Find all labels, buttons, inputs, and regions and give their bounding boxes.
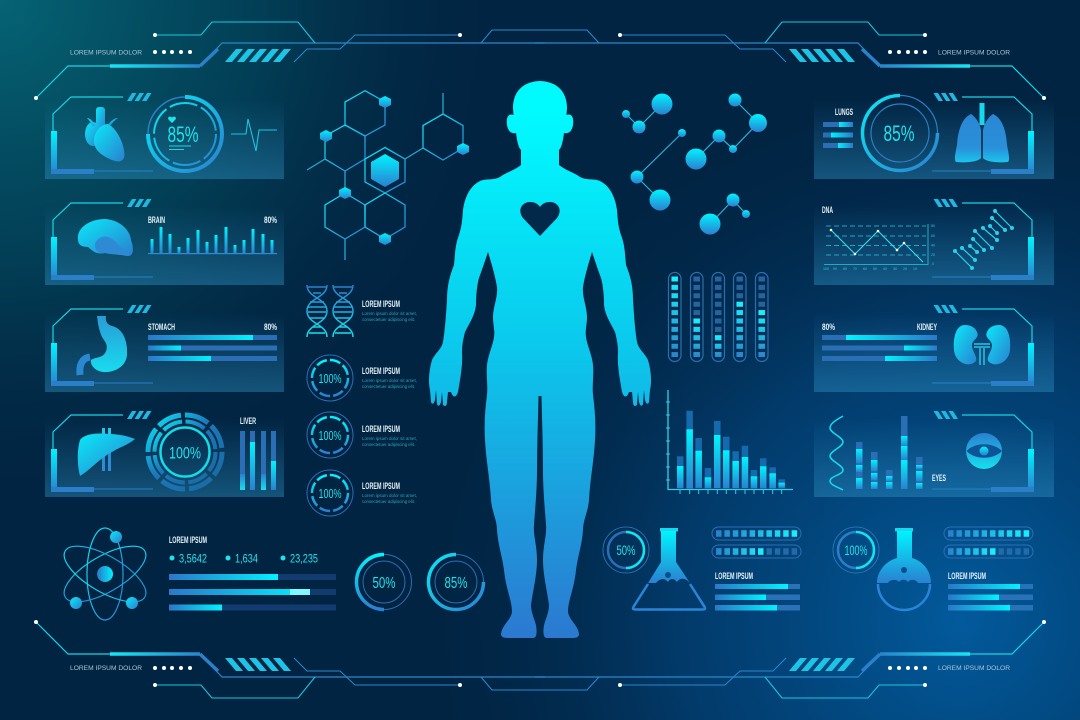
flask group right: LOREM IPSUM [948, 571, 986, 582]
atom icon [56, 528, 154, 620]
ring: 100% [148, 415, 222, 489]
line chart: DNA: 50 [873, 267, 877, 271]
ring list item 3: consectetuer adipiscing elit. [362, 499, 415, 504]
line chart: DNA: 40 [931, 244, 935, 248]
molecules [622, 94, 767, 234]
line chart: DNA: 80 [843, 267, 847, 271]
panel: stomach: STOMACH [148, 322, 175, 333]
panel: brain: 80% [264, 215, 277, 226]
ring list item 1 [307, 355, 417, 401]
hexagon molecule network [307, 91, 469, 260]
icon: liver [78, 428, 135, 476]
line chart: DNA: 20 [903, 267, 907, 271]
ring list item 3 [307, 470, 417, 516]
pill meters [944, 527, 1033, 558]
ring list item 1: 100% [318, 371, 342, 386]
bottom circuit decoration [34, 620, 1046, 698]
icon: heart organ [85, 107, 124, 161]
ring list item 1: Lorem ipsum dolor sit amet, [362, 378, 417, 383]
panel: liver [45, 411, 284, 497]
bottom circuit decoration: LOREM IPSUM DOLOR [938, 665, 1010, 672]
panel: lungs [814, 93, 1054, 179]
panel: DNA [814, 199, 1054, 285]
statistics block: 23,235 [290, 552, 318, 566]
human body silhouette [429, 81, 651, 638]
ring: 85%: 85% [168, 122, 198, 147]
ring: 50% flask [603, 527, 649, 573]
statistics block: 3,5642 [179, 552, 207, 566]
panel: heart [45, 93, 284, 179]
ring list item 1: consectetuer adipiscing elit. [362, 384, 415, 389]
top circuit decoration: LOREM IPSUM DOLOR [938, 50, 1010, 56]
ring list item 2: consectetuer adipiscing elit. [362, 442, 415, 447]
text block: DNA note: Lorem ipsum dolor sit amet, [362, 311, 417, 316]
bar chart: center right [666, 390, 793, 494]
icon: lungs [955, 103, 1009, 162]
pill meters [712, 527, 801, 558]
ring: 50% [356, 554, 412, 610]
ring list item 3: 100% [318, 486, 342, 501]
ring: 50%: 50% [372, 575, 396, 592]
panel: kidney [814, 305, 1054, 392]
text block: DNA note [362, 299, 417, 322]
panel: stomach [45, 305, 284, 392]
line chart: DNA: 40 [883, 267, 887, 271]
ring: 50% flask: 50% [616, 542, 636, 558]
icon: round flask [877, 528, 931, 610]
ring: 85% [148, 97, 222, 171]
line chart: DNA: 60 [863, 267, 867, 271]
ring list item 2 [307, 412, 417, 458]
panel: kidney: KIDNEY [917, 322, 937, 333]
line chart: DNA: 60 [931, 234, 935, 238]
ring: 100% flask: 100% [844, 542, 868, 558]
icon: kidneys [954, 325, 1010, 365]
icon: diagonal DNA [953, 209, 1014, 270]
ring list item 3: LOREM IPSUM [362, 481, 400, 492]
chart: pulse [231, 119, 277, 151]
progress bars [715, 584, 800, 610]
panel: liver: LIVER [240, 416, 256, 427]
flask group right [833, 527, 1033, 610]
panel: brain: BRAIN [148, 215, 165, 226]
bar chart: liver [240, 431, 276, 490]
line chart: DNA: 100 [823, 267, 829, 271]
icon: eye [966, 433, 1002, 469]
ring list item 1: LOREM IPSUM [362, 366, 400, 377]
line chart: DNA: 0 [932, 262, 934, 266]
statistics block: LOREM IPSUM [169, 535, 207, 546]
level meters [668, 272, 768, 362]
ring: 100% flask [833, 527, 879, 573]
panel: brain [45, 199, 284, 285]
panel: lungs: LUNGS [835, 107, 853, 118]
icon: conical flask [633, 528, 705, 610]
ring list item 2: LOREM IPSUM [362, 424, 400, 435]
line chart: DNA: 70 [853, 267, 857, 271]
progress bars [948, 584, 1033, 610]
DNA helix icons [307, 285, 353, 337]
flask group left [603, 527, 801, 610]
progress bars: lungs [823, 122, 853, 148]
icon: stomach [80, 316, 127, 375]
bottom circuit decoration: LOREM IPSUM DOLOR [70, 665, 142, 672]
line chart: DNA [823, 224, 935, 271]
panel: eyes [814, 411, 1054, 497]
ring list item 2: 100% [318, 428, 342, 443]
line chart: DNA: 20 [931, 253, 935, 257]
ring: 85% small [428, 554, 484, 610]
line chart: DNA: 30 [893, 267, 897, 271]
ring list item 2: Lorem ipsum dolor sit amet, [362, 436, 417, 441]
wave chart [830, 416, 843, 490]
ring: 100%: 100% [169, 444, 201, 462]
heart cut-out [520, 202, 560, 236]
line chart: DNA: 90 [833, 267, 837, 271]
text block: DNA note: LOREM IPSUM [362, 299, 400, 310]
ring: lungs 85% [862, 96, 938, 170]
line chart: DNA: 80 [931, 224, 935, 228]
ring: lungs 85%: 85% [884, 121, 914, 146]
bar chart: eyes [856, 416, 922, 489]
panel: DNA: DNA [822, 205, 833, 216]
top circuit decoration: LOREM IPSUM DOLOR [70, 50, 142, 56]
progress bars: stomach [148, 335, 277, 361]
flask group left: LOREM IPSUM [715, 571, 753, 582]
text block: DNA note: consectetuer adipiscing elit. [362, 317, 415, 322]
line chart: DNA: 10 [913, 267, 917, 271]
icon: brain [78, 219, 133, 256]
panel: stomach: 80% [264, 322, 277, 333]
statistics block [169, 535, 336, 610]
ring list item 3: Lorem ipsum dolor sit amet, [362, 493, 417, 498]
statistics block: 1,634 [235, 552, 258, 566]
top circuit decoration [34, 22, 1046, 100]
progress bars: kidney [822, 335, 937, 361]
ring: 85% small: 85% [444, 575, 468, 592]
panel: kidney: 80% [822, 322, 835, 333]
panel: eyes: EYES [932, 473, 946, 484]
bar chart: brain [148, 227, 277, 254]
